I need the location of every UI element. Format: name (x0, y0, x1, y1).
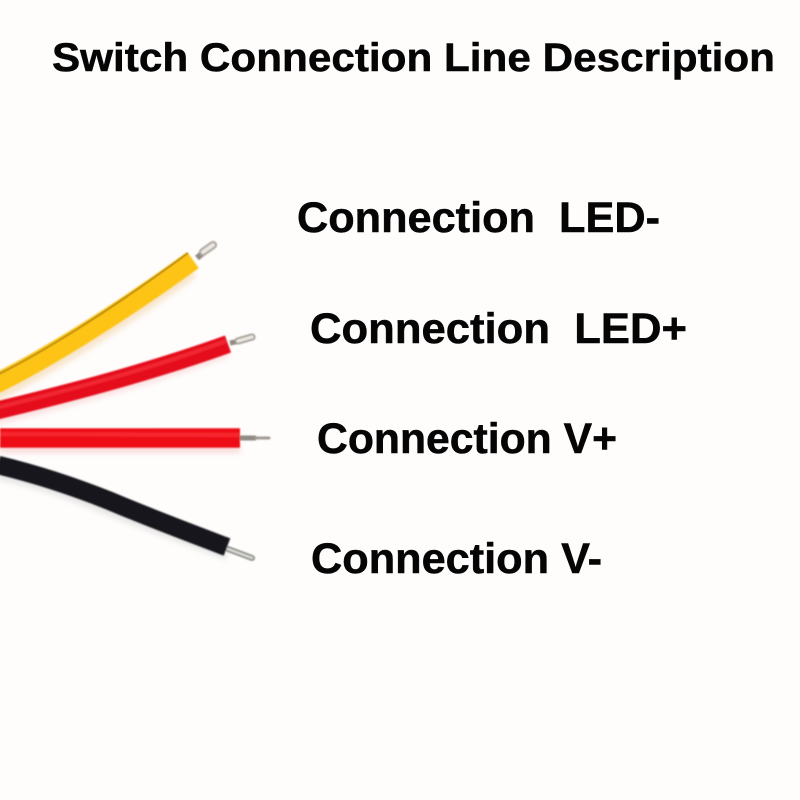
black wire (0, 465, 252, 558)
title: Switch Connection Line Description (52, 36, 775, 80)
lower red wire (0, 434, 269, 438)
label: LED-: Connection LED- (297, 194, 660, 242)
label: LED+: Connection LED+ (310, 305, 687, 353)
wire bundle (0, 245, 269, 558)
wire shadows (0, 272, 240, 556)
label: V-: Connection V- (311, 535, 602, 583)
label: V+: Connection V+ (317, 415, 617, 463)
upper red wire (0, 337, 252, 411)
yellow wire (0, 245, 213, 384)
